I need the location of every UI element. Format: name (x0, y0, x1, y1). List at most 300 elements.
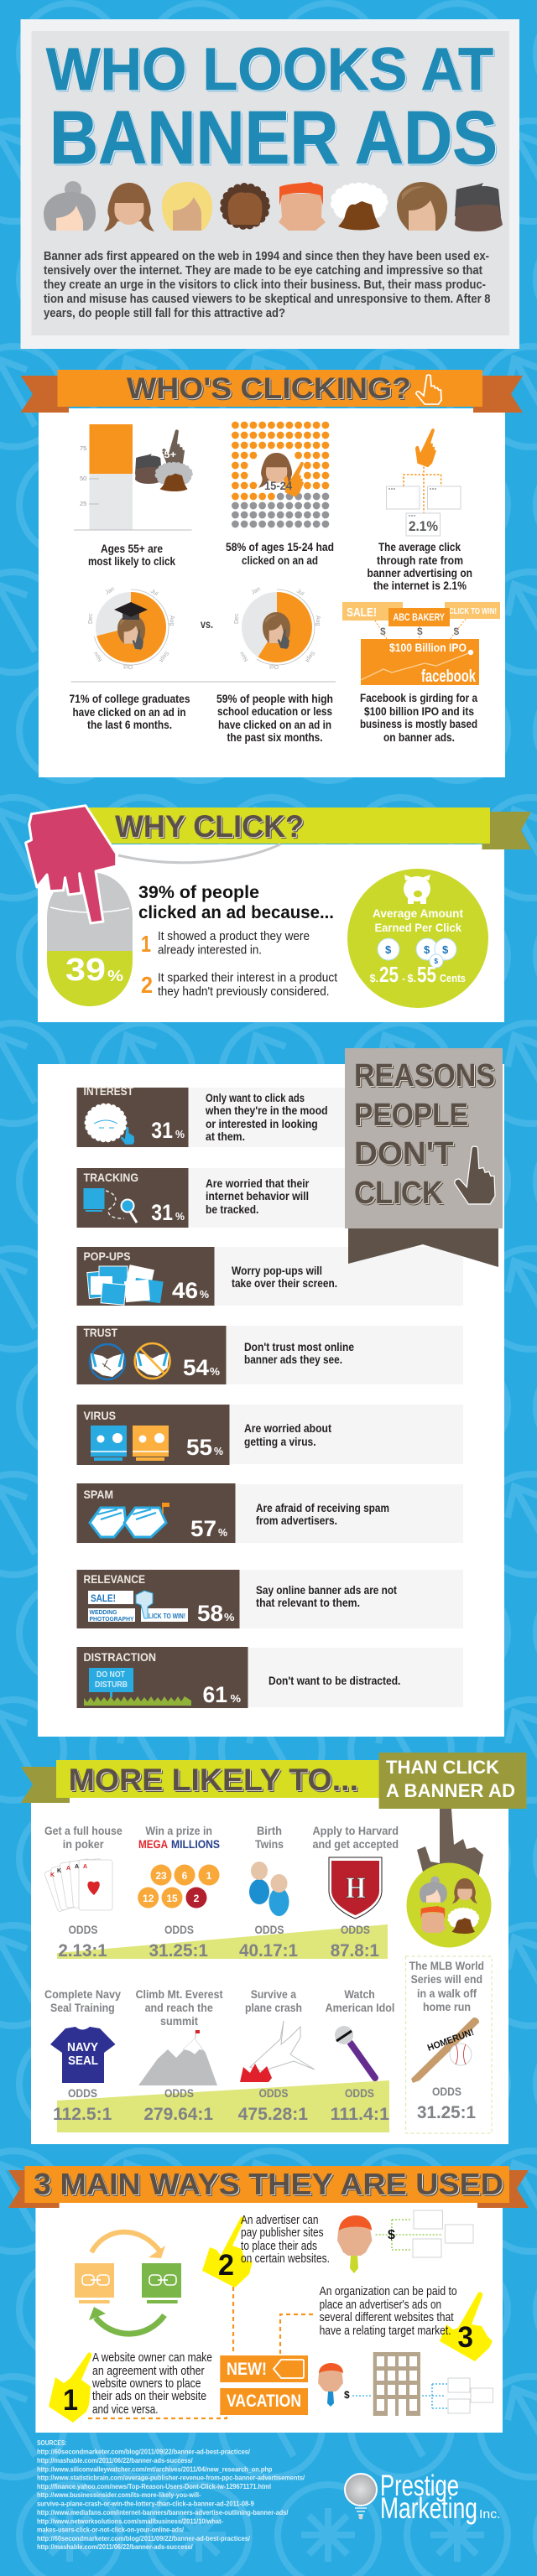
caption: ages 15-24 (226, 540, 334, 567)
icon: ads with thumb down: SALE! (91, 1592, 116, 1604)
icon: playing cards: A (75, 1864, 79, 1870)
diagram: click through rate (386, 425, 461, 536)
pie chart: high school education: Oct (269, 663, 279, 669)
row: pop-ups: 46 (172, 1278, 198, 1303)
panel: 3 main ways (8, 2166, 529, 2433)
item: everest: and reach the (145, 2001, 213, 2014)
pie chart: high school education: Jul (295, 589, 305, 597)
sources: http://finance.yahoo.com/news/Top-Reason-Users-Dont-Click-iw-129671171.html (37, 2482, 271, 2490)
banner: vacation: VACATION (227, 2392, 301, 2411)
box: than click a banner ad: THAN CLICK (386, 1757, 499, 1778)
item: harvard: and get accepted (312, 1837, 399, 1851)
item: navy seal (44, 1987, 121, 2124)
pie chart: high school education (234, 586, 321, 669)
icon: do not disturb sign (84, 1668, 191, 1706)
row: tracking (77, 1168, 463, 1228)
box: world series: The MLB World (409, 1959, 484, 1972)
item: birth twins: Birth (257, 1824, 282, 1837)
item: plane crash: plane crash (245, 2001, 302, 2014)
item: mega millions: MILLIONS (171, 1837, 220, 1851)
heading: 39% of people (138, 883, 334, 922)
sources: http://www.mediafans.com/internet-banners/banners-advertise-outlining-banner-ads/ (37, 2508, 289, 2516)
caption: facebook: on banner ads. (383, 730, 455, 744)
badge: average amount per click: Average Amount (373, 906, 463, 920)
ribbon: more likely to (21, 1760, 379, 1803)
logo: prestige marketing: Prestige (380, 2470, 459, 2502)
step 3: 3 (458, 2321, 473, 2354)
pie chart: high school education: Dec (234, 613, 240, 624)
sources: survive-a-plane-crash-or-win-the-lottery-than-click-a-banner-ad-2011-08-9 (37, 2500, 254, 2508)
item: birth twins: 40.17:1 (239, 1941, 298, 1961)
diagram: facebook IPO (342, 602, 500, 686)
row: trust: TRUST (84, 1326, 117, 1339)
banner: vacation (220, 2388, 308, 2415)
icon: mountain (138, 2030, 217, 2085)
caption: college graduates (69, 692, 190, 731)
badge: average amount per click: $ (424, 943, 430, 956)
pie chart: high school education: Sept (304, 650, 315, 663)
logo: prestige marketing: Marketing (380, 2492, 477, 2525)
row: trust: Don't trust most online (244, 1340, 354, 1353)
row: virus: Are worried about (244, 1421, 331, 1435)
step 3: several different websites that (320, 2311, 454, 2324)
heading: 39% of people: 39% of people (138, 883, 259, 902)
icon: twin babies (249, 1862, 289, 1916)
icon: lottery balls: 2 (194, 1893, 200, 1904)
caption: click through rate: banner advertising on (368, 566, 472, 579)
caption: click through rate: The average click (378, 540, 461, 553)
badge: average amount per click: Earned Per Click (374, 921, 461, 934)
sources: http://www.siliconvalleywatcher.com/mt/archives/2011/04/new_research_on.php (37, 2464, 272, 2473)
item: american idol: Watch (344, 1987, 375, 2001)
badge: average amount per click: $ (442, 943, 449, 956)
sources: http://mashable.com/2011/06/22/banner-ads-success/ (37, 2456, 193, 2464)
row: interest: INTEREST (84, 1084, 133, 1098)
odds wedge: row 1 (57, 1924, 388, 1959)
pie chart: college graduates: Sept (158, 650, 169, 663)
row: interest: Only want to click ads (206, 1091, 305, 1104)
icon: playing cards: A (66, 1866, 70, 1872)
item: harvard (312, 1824, 399, 1961)
icon: hand over faces (406, 1809, 492, 1947)
caption: ages 55+ (88, 542, 175, 568)
icon: ads with thumb down: WEDDING (89, 1610, 117, 1616)
row: distraction: Don't want to be distracted. (268, 1674, 400, 1687)
title (46, 37, 498, 180)
step 2 (202, 2210, 473, 2288)
icon: pop-up windows (87, 1265, 164, 1305)
row: relevance: RELEVANCE (84, 1572, 145, 1586)
caption: facebook: Facebook is girding for a (360, 691, 477, 704)
icon: person (318, 2363, 343, 2407)
badge: average amount per click: - (402, 973, 405, 984)
item: harvard: ODDS (341, 1924, 370, 1936)
box: world series: 31.25:1 (417, 2103, 476, 2122)
pie chart: college graduates: Nov (92, 650, 104, 662)
icon: navy seal shirt (50, 2027, 116, 2083)
icon: yellow hand 2 (202, 2216, 253, 2288)
step 3: An organization can be paid to (320, 2285, 457, 2298)
icon: lottery balls: 6 (182, 1870, 188, 1882)
item: birth twins (239, 1824, 298, 1961)
icon: skull monitors (91, 1426, 169, 1461)
caption: college graduates: 71% of college graduates (69, 692, 190, 705)
row: virus (77, 1405, 463, 1465)
box: world series: in a walk off (417, 1987, 477, 2000)
diagram: networked websites: $ (344, 2389, 350, 2401)
step 2: pay publisher sites (241, 2226, 324, 2240)
icon: navy seal shirt: NAVY (67, 2040, 98, 2054)
panel: reasons people don't click (38, 1048, 504, 1737)
caption: high school: 59% of people with high (216, 692, 333, 705)
badge: average amount per click: $. (408, 972, 416, 984)
tag: reasons people don't click (345, 1048, 503, 1267)
row: distraction (77, 1647, 463, 1708)
sources (37, 2438, 305, 2551)
badge: average amount per click: 25 (379, 962, 399, 987)
dashed connectors (88, 2287, 314, 2418)
item: navy seal: Complete Navy (44, 1987, 121, 2001)
icon: sleeping face (87, 1106, 134, 1145)
box: world series: ODDS (432, 2085, 461, 2098)
item: full house: ODDS (69, 1924, 97, 1936)
row: interest: at them. (206, 1130, 245, 1143)
intro paragraph: years, do people still fall for this attractive ad? (44, 306, 285, 320)
pie chart: high school education: Aug (315, 615, 321, 626)
item: birth twins: Twins (255, 1837, 284, 1851)
row: interest: or interested in looking (206, 1117, 318, 1130)
icon: yellow hand 3 (440, 2292, 493, 2361)
diagram: paid placements: $ (388, 2228, 395, 2242)
row: virus: 55 (186, 1435, 212, 1460)
list: reasons to click: they hadn't previously considered. (158, 985, 329, 999)
item: harvard: Apply to Harvard (312, 1824, 399, 1837)
ribbon: 3 main ways: 3 MAIN WAYS THEY ARE USED (34, 2167, 503, 2201)
row: pop-ups: POP-UPS (84, 1249, 131, 1263)
row: spam: 57 (190, 1516, 216, 1541)
icon: microphone (335, 2026, 375, 2078)
sources: http://www.networksolutions.com/smallbusiness/2011/10/what- (37, 2516, 223, 2525)
logo: prestige marketing (345, 2470, 500, 2525)
row: tracking: be tracked. (206, 1202, 258, 1216)
item: plane crash: Survive a (251, 1987, 296, 2001)
row: tracking: internet behavior will (206, 1189, 309, 1202)
caption: ages 55+: most likely to click (88, 554, 175, 568)
sources: makes-users-click-or-not-click-on-your-online-ads/ (37, 2525, 185, 2533)
item: everest: summit (160, 2014, 198, 2028)
diagram: click through rate: 2.1% (409, 518, 438, 534)
row: trust: % (210, 1365, 220, 1378)
icon: lottery balls: 12 (143, 1893, 154, 1904)
tag: reasons people don't click: DON'T (354, 1136, 454, 1171)
sources: http://60secondmarketer.com/blog/2011/09/22/banner-ad-best-practices/ (37, 2448, 251, 2456)
item: american idol: American Idol (326, 2001, 394, 2014)
icon: harvard shield: H (346, 1871, 366, 1904)
icon: harvard shield (329, 1857, 382, 1919)
row: pop-ups (77, 1247, 463, 1306)
badge: average amount per click: $ (385, 943, 392, 956)
row: virus: % (214, 1445, 223, 1457)
item: full house: in poker (63, 1837, 104, 1851)
ribbon: who's clicking (20, 370, 523, 413)
diagram: facebook IPO: SALE! (347, 605, 377, 620)
row: relevance: Say online banner ads are not (256, 1583, 397, 1597)
icon: person with hand (263, 612, 291, 649)
row: interest: 31 (151, 1118, 173, 1143)
caption: facebook: business is mostly based (360, 717, 477, 730)
list: reasons to click: already interested in. (158, 943, 262, 957)
row: distraction: % (231, 1692, 241, 1705)
panel: header (20, 19, 519, 349)
row: relevance: % (224, 1611, 235, 1623)
pie chart: college graduates (88, 586, 175, 669)
banner: new! (220, 2355, 308, 2382)
sources: http://mashable.com/2011/06/22/banner-ads-success/ (37, 2542, 193, 2551)
diagram: link exchange (75, 2232, 181, 2334)
step 3: place an advertiser's ads on (320, 2298, 441, 2312)
heading: 39% of people: clicked an ad because... (138, 903, 334, 922)
bar chart: ages 55+: 25 (80, 500, 86, 507)
step 1: their ads on their website (92, 2390, 206, 2403)
sources: http://www.statisticbrain.com/average-publisher-revenue-from-ppc-banner-advertisements/ (37, 2474, 305, 2482)
item: full house (44, 1824, 123, 1961)
item: everest: 279.64:1 (143, 2105, 213, 2124)
caption: click through rate: through rate from (377, 553, 463, 567)
intro paragraph: tensively over the internet. They are made to be eye catching and impressive so that (44, 263, 482, 278)
box: than click a banner ad (379, 1753, 527, 1809)
row: interest (77, 1084, 463, 1147)
item: mega millions: ODDS (164, 1924, 194, 1936)
row: tracking: 31 (151, 1200, 173, 1225)
icon: handshakes (90, 1343, 170, 1379)
diagram: facebook IPO: $ (380, 626, 386, 637)
icon: lottery balls: 1 (206, 1870, 212, 1882)
caption: high school (216, 692, 333, 744)
caption: ages 15-24: 58% of ages 15-24 had (226, 540, 334, 553)
icon: pink hand (26, 806, 117, 923)
row: distraction: 61 (203, 1682, 227, 1707)
icon: mouse with cord: 39 (65, 953, 106, 988)
pie chart: college graduates: Dec (88, 613, 94, 624)
row: trust: banner ads they see. (244, 1353, 342, 1366)
step 1: A website owner can make (92, 2351, 212, 2365)
box: world series (406, 1956, 492, 2133)
step 1: and vice versa. (92, 2403, 158, 2417)
icon: advertiser (337, 2215, 373, 2273)
item: navy seal: 112.5:1 (53, 2105, 112, 2124)
label: vs.: vs. (201, 617, 213, 631)
row: spam: SPAM (84, 1488, 113, 1501)
intro paragraph (44, 249, 490, 320)
icon: playing cards: A (83, 1864, 87, 1870)
caption: college graduates: the last 6 months. (87, 718, 172, 731)
bar chart: ages 55+ (74, 424, 192, 530)
caption: high school: have clicked on an ad in (218, 718, 331, 731)
pie chart: high school education: Nov (238, 650, 250, 662)
list: reasons to click: 1 (141, 931, 151, 957)
caption: ages 15-24: clicked on an ad (242, 553, 318, 567)
icon: tracking magnifier (84, 1188, 137, 1223)
diagram: facebook IPO: $ (417, 626, 423, 637)
row: virus: getting a virus. (244, 1435, 316, 1448)
item: mega millions: 31.25:1 (149, 1941, 208, 1961)
diagram: facebook IPO: ABC BAKERY (393, 611, 445, 623)
ribbon: why click (87, 808, 531, 849)
icon: bat and ball (411, 2018, 479, 2083)
logo: prestige marketing: Inc. (479, 2507, 500, 2521)
icon: brown hand (455, 1146, 495, 1204)
list: reasons to click: It showed a product they were (158, 930, 310, 943)
item: full house: Get a full house (44, 1824, 123, 1837)
tag: reasons people don't click: PEOPLE (354, 1098, 468, 1133)
step 1: an agreement with other (92, 2365, 205, 2378)
item: plane crash (238, 1987, 315, 2124)
row: trust: 54 (183, 1355, 209, 1380)
icon: ads with thumb down: CLICK TO WIN! (144, 1613, 185, 1620)
row: interest: % (175, 1128, 185, 1140)
panel: more likely to (21, 1753, 527, 2144)
icon: lottery balls: 15 (166, 1893, 178, 1904)
item: mega millions: Win a prize in (145, 1824, 212, 1837)
step 2: to place their ads (241, 2240, 317, 2253)
row: spam: Are afraid of receiving spam (256, 1501, 389, 1514)
list: reasons to click (141, 930, 337, 999)
title: BANNER ADS (50, 96, 498, 180)
sources: SOURCES: (37, 2438, 67, 2447)
row: spam: from advertisers. (256, 1514, 337, 1527)
step 2: on certain websites. (241, 2252, 330, 2266)
title: WHO LOOKS AT (46, 37, 493, 103)
row: trust (77, 1326, 463, 1384)
icon: do not disturb sign: DO NOT (96, 1670, 125, 1680)
bar chart: ages 55+: 75 (80, 444, 86, 452)
icon: playing cards: K (50, 1872, 55, 1878)
list: reasons to click: It sparked their interest in a product (158, 972, 337, 985)
badge: average amount per click: Cents (440, 972, 466, 984)
row: relevance: 58 (197, 1601, 223, 1626)
row of faces (44, 181, 503, 231)
icon: yellow hand 1 (49, 2352, 91, 2423)
item: everest: Climb Mt. Everest (136, 1987, 223, 2001)
item: mega millions (138, 1824, 220, 1961)
caption: college graduates: have clicked on an ad in (72, 705, 186, 719)
row: spam (77, 1483, 463, 1543)
icon: graduate with hand (114, 602, 148, 650)
step 1 (49, 2351, 212, 2423)
item: harvard: 87.8:1 (331, 1941, 379, 1961)
caption: click through rate (368, 540, 472, 592)
item: full house: 2.13:1 (58, 1941, 107, 1961)
box: than click a banner ad: A BANNER AD (386, 1780, 515, 1801)
row: pop-ups: % (200, 1288, 209, 1301)
ribbon: why click: WHY CLICK? (115, 809, 304, 844)
step 3 (318, 2285, 493, 2416)
row: pop-ups: Worry pop-ups will (232, 1264, 322, 1277)
row: interest: when they're in the mood (205, 1104, 327, 1117)
item: plane crash: ODDS (258, 2087, 289, 2100)
panel: who's clicking (20, 370, 523, 777)
diagram: paid placements (376, 2210, 473, 2257)
diagram: facebook IPO: $ (453, 626, 460, 637)
icon: do not disturb sign: DISTURB (95, 1680, 128, 1690)
icon: cursor hand (416, 375, 441, 404)
icon: navy seal shirt: SEAL (68, 2054, 98, 2068)
row: tracking: TRACKING (84, 1171, 138, 1184)
item: mega millions: MEGA (138, 1837, 168, 1851)
item: everest (136, 1987, 223, 2124)
pie chart: college graduates: Oct (123, 663, 133, 669)
diagram: networked websites (344, 2378, 493, 2413)
pie chart: college graduates: Aug (169, 615, 175, 626)
icon: face and hand 15-24: 15-24 (264, 479, 292, 492)
icon: lottery balls (138, 1865, 220, 1909)
caption: ages 55+: Ages 55+ are (101, 542, 163, 555)
icon: mail stacks (90, 1503, 169, 1537)
row: tracking: Are worried that their (206, 1176, 310, 1190)
caption: high school: the past six months. (227, 730, 322, 744)
item: american idol: 111.4:1 (331, 2105, 389, 2124)
sources: http://www.businessinsider.com/its-more-likely-you-will- (37, 2490, 201, 2499)
dot chart: 58% of ages 15-24 (235, 425, 326, 524)
row: relevance (77, 1570, 463, 1628)
item: american idol (326, 1987, 394, 2124)
icon: mouse with cord (47, 844, 280, 1006)
tag: reasons people don't click: CLICK (354, 1176, 443, 1211)
tag: reasons people don't click: REASONS (354, 1058, 495, 1093)
icon: office building (373, 2352, 420, 2416)
item: plane crash: 475.28:1 (238, 2105, 308, 2124)
diagram: facebook IPO: $100 Billion IPO (389, 641, 467, 654)
item: everest: ODDS (164, 2087, 194, 2100)
badge: average amount per click: 55 (417, 962, 436, 987)
caption: click through rate: the internet is 2.1% (373, 579, 467, 592)
box: world series: home run (423, 2000, 471, 2013)
step 1: website owners to place (91, 2377, 201, 2391)
row: spam: % (218, 1526, 227, 1539)
diagram: facebook IPO: facebook (421, 667, 477, 686)
icon: hand with faces (135, 428, 190, 491)
badge: average amount per click: $ (435, 958, 438, 965)
item: birth twins: ODDS (255, 1924, 284, 1936)
ribbon: more likely to: MORE LIKELY TO... (69, 1763, 358, 1797)
icon: crashing plane (240, 2021, 315, 2082)
bar chart: ages 55+: 50 (80, 475, 86, 482)
caption: facebook (360, 691, 477, 744)
icon: playing cards: K (57, 1868, 61, 1874)
icon: ads with thumb down: PHOTOGRAPHY (89, 1617, 134, 1623)
icon: bat and ball: HOMERUN! (426, 2028, 476, 2054)
row: distraction: DISTRACTION (84, 1650, 156, 1664)
pie chart: college graduates: Jan (104, 586, 116, 596)
diagram: facebook IPO: CLICK TO WIN! (449, 607, 497, 616)
list: reasons to click: 2 (141, 972, 153, 998)
badge: average amount per click: $. (370, 972, 378, 984)
row: tracking: % (175, 1210, 185, 1223)
row: virus: VIRUS (84, 1409, 116, 1422)
sources: http://60secondmarketer.com/blog/2011/09/22/banner-ad-best-practices/ (37, 2534, 251, 2542)
pie chart: college graduates: Jul (149, 589, 159, 597)
banner: new!: NEW! (227, 2360, 267, 2379)
icon: piggy bank (404, 875, 430, 904)
badge: average amount per click (347, 869, 488, 1008)
icon: mouse with cord: % (107, 968, 123, 984)
ribbon: who's clicking: WHO'S CLICKING? (127, 372, 411, 405)
icon: hand with faces: 55+ (158, 449, 176, 460)
box: world series: Series will end (411, 1972, 482, 1986)
icon: lottery balls: 23 (155, 1870, 167, 1882)
caption: facebook: $100 billion IPO and its (364, 704, 474, 718)
step 3: have a relating target market. (320, 2324, 451, 2338)
